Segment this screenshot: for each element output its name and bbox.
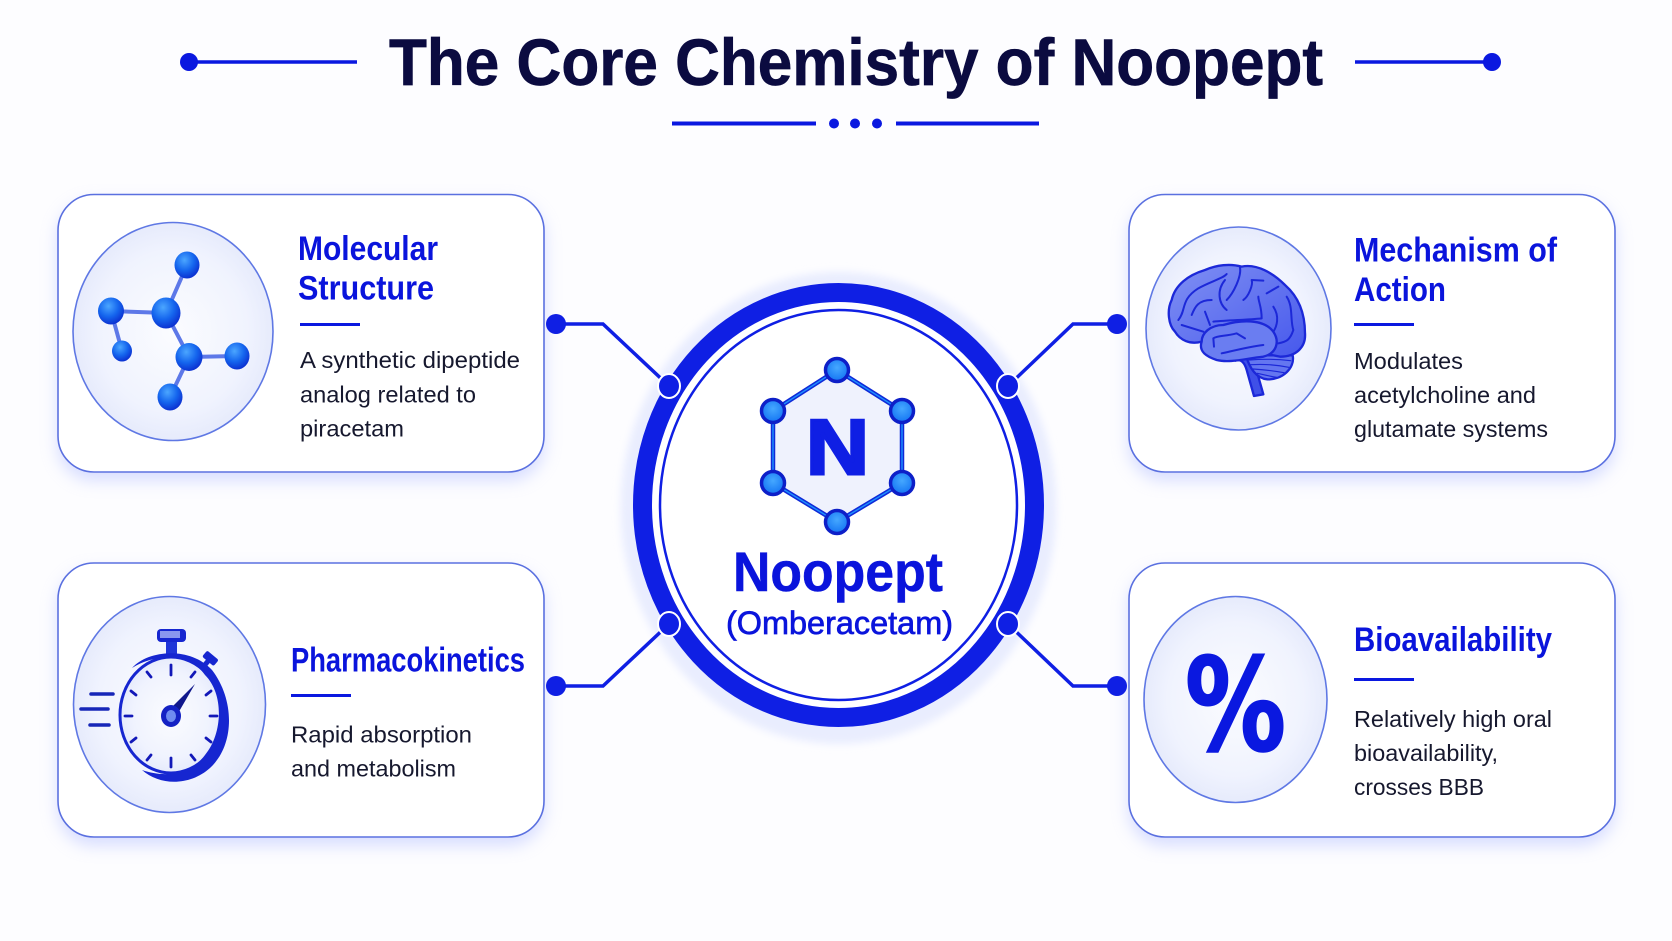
heading xyxy=(1354,232,1558,309)
heading: Mechanism of xyxy=(1354,232,1558,270)
heading: Bioavailability xyxy=(1354,621,1552,659)
icon: brain xyxy=(1146,227,1331,430)
title underline with dots xyxy=(672,118,1039,128)
icon: hexagon N molecule xyxy=(762,358,914,534)
heading: Structure xyxy=(298,270,434,308)
connector: bioavailability to hub xyxy=(997,612,1127,696)
heading: Action xyxy=(1354,271,1446,309)
connector: molecular structure to hub xyxy=(546,314,680,398)
body text: and metabolism xyxy=(291,756,456,782)
body text: acetylcholine and xyxy=(1354,382,1536,408)
hub subtitle: (Omberacetam) xyxy=(726,605,953,641)
panel: bioavailability xyxy=(1129,563,1615,837)
panel: mechanism of action xyxy=(1129,194,1615,472)
body text xyxy=(1354,706,1552,800)
title ornament: left line and dot xyxy=(180,53,357,71)
icon: percent xyxy=(1144,596,1327,802)
heading xyxy=(298,230,438,308)
panel: molecular structure xyxy=(58,194,544,472)
connector: pharmacokinetics to hub xyxy=(546,612,680,696)
icon: percent: % xyxy=(1185,632,1286,781)
central hub xyxy=(620,272,1056,744)
panel: pharmacokinetics xyxy=(58,563,544,837)
body text: glutamate systems xyxy=(1354,416,1548,442)
title ornament: right line and dot xyxy=(1355,53,1501,71)
icon: hexagon N molecule: N xyxy=(806,403,869,491)
icon: molecule xyxy=(73,222,273,440)
icon: stopwatch xyxy=(74,596,266,812)
body text: bioavailability, xyxy=(1354,740,1498,766)
body text: analog related to xyxy=(300,382,476,408)
body text: A synthetic dipeptide xyxy=(300,347,520,373)
connector: mechanism of action to hub xyxy=(997,314,1127,398)
body text xyxy=(291,722,472,782)
body text: Relatively high oral xyxy=(1354,706,1552,732)
heading: Pharmacokinetics xyxy=(291,642,525,680)
body text xyxy=(300,347,520,442)
body text: Modulates xyxy=(1354,348,1463,374)
hub name: Noopept xyxy=(733,540,943,603)
title: The Core Chemistry of Noopept xyxy=(389,25,1323,99)
body text: crosses BBB xyxy=(1354,774,1484,800)
body text: Rapid absorption xyxy=(291,722,472,748)
body text: piracetam xyxy=(300,416,404,442)
heading: Molecular xyxy=(298,230,438,268)
body text xyxy=(1354,348,1548,442)
